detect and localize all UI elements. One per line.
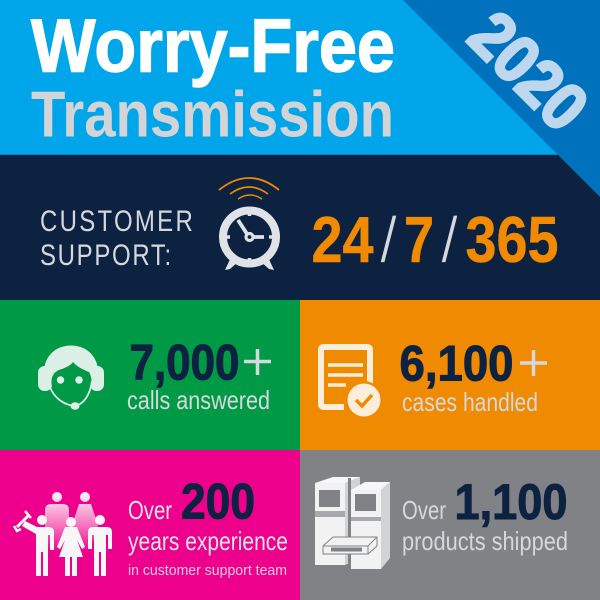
icon: alarm clock with signal xyxy=(219,178,279,270)
panel: customer support band xyxy=(0,155,600,300)
heading: customer support: SUPPORT: xyxy=(40,237,171,272)
icon: server racks and device xyxy=(315,477,390,569)
icon: plus xyxy=(244,349,271,375)
stat: 200: 200 xyxy=(181,474,255,530)
label: calls answered: calls answered xyxy=(127,385,270,415)
icon: team with wrench xyxy=(14,492,112,576)
label: cases handled: cases handled xyxy=(402,387,538,417)
panel: calls answered xyxy=(0,300,300,450)
label: years experience: years experience xyxy=(128,526,288,556)
label: over: Over xyxy=(402,495,446,525)
stat: 24/7/365: 7 xyxy=(404,203,434,276)
panel: header xyxy=(0,0,600,156)
label: products shipped: products shipped xyxy=(402,526,568,556)
year ribbon xyxy=(403,0,600,197)
title: Transmission: Transmission xyxy=(31,78,394,150)
panel: products shipped xyxy=(300,450,600,600)
stat: 24/7/365: 365 xyxy=(466,203,558,276)
label: in customer support team: in customer support team xyxy=(128,562,287,579)
title: Worry-Free: Worry-Free xyxy=(31,4,395,88)
label: over: Over xyxy=(128,495,172,525)
stat: 24/7/365: 24 xyxy=(312,203,374,276)
panel: cases handled xyxy=(300,300,600,450)
stat: 24/7/365: / xyxy=(380,203,398,276)
heading: customer support xyxy=(40,203,193,272)
stat: 1,100: 1,100 xyxy=(454,474,568,530)
panel: experience xyxy=(0,450,300,600)
heading: customer support: CUSTOMER xyxy=(40,203,193,238)
icon: document with check xyxy=(321,347,383,419)
stat: 7,000+: 7,000 xyxy=(130,334,240,390)
stat: 24/7/365: / xyxy=(441,203,459,276)
stat: 6,100+: 6,100 xyxy=(400,336,514,392)
icon: plus xyxy=(520,350,547,376)
icon: support agent xyxy=(38,346,104,410)
stat: 24/7/365 xyxy=(312,203,558,276)
